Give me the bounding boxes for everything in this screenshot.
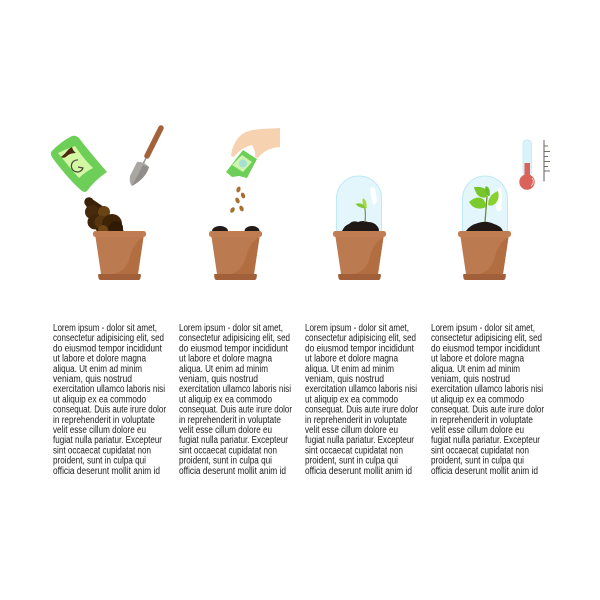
- text column 4: consequat. Duis aute irure dolor: [431, 405, 545, 416]
- text column 3: consectetur adipisicing elit, sed: [305, 333, 416, 344]
- text column 2: exercitation ullamco laboris nisi: [179, 384, 291, 395]
- text column 4: aliqua. Ut enim ad minim: [431, 364, 520, 375]
- text column 2: fugiat nulla pariatur. Excepteur: [179, 435, 289, 446]
- text column 1: Lorem ipsum - dolor sit amet,: [53, 323, 157, 334]
- text column 4: in reprehenderit in voluptate: [431, 415, 533, 426]
- text column 3: consequat. Duis aute irure dolor: [305, 405, 419, 416]
- text column 4: ut aliquip ex ea commodo: [431, 394, 524, 405]
- text column 1: ut aliquip ex ea commodo: [53, 394, 146, 405]
- text column 4: consectetur adipisicing elit, sed: [431, 333, 542, 344]
- text column 2: ut aliquip ex ea commodo: [179, 394, 272, 405]
- text column 3: [305, 323, 419, 477]
- text column 3: sint occaecat cupidatat non: [305, 445, 403, 456]
- icon: hand: [231, 128, 280, 158]
- seeds: [229, 186, 246, 214]
- icon: trowel: [130, 128, 161, 186]
- pot: [93, 231, 146, 280]
- step 3: sprout under glass: [333, 176, 386, 280]
- text column 2: officia deserunt mollit anim id: [179, 466, 286, 477]
- icon: thermometer: [519, 140, 535, 190]
- soil mounds: [212, 226, 260, 231]
- text column 3: velit esse cillum dolore eu: [305, 425, 398, 436]
- glass dome: [462, 176, 508, 231]
- text column 2: ut labore et dolore magna: [179, 354, 272, 365]
- text column 1: aliqua. Ut enim ad minim: [53, 364, 142, 375]
- text column 3: in reprehenderit in voluptate: [305, 415, 407, 426]
- text column 2: aliqua. Ut enim ad minim: [179, 364, 268, 375]
- text column 1: [53, 323, 167, 477]
- pot: [209, 231, 262, 280]
- text column 2: Lorem ipsum - dolor sit amet,: [179, 323, 283, 334]
- text column 4: fugiat nulla pariatur. Excepteur: [431, 435, 541, 446]
- soil: [466, 222, 503, 231]
- text column 1: exercitation ullamco laboris nisi: [53, 384, 165, 395]
- text column 2: consequat. Duis aute irure dolor: [179, 405, 293, 416]
- text column 1: fugiat nulla pariatur. Excepteur: [53, 435, 163, 446]
- text column 3: ut aliquip ex ea commodo: [305, 394, 398, 405]
- text column 4: sint occaecat cupidatat non: [431, 445, 529, 456]
- text column 1: velit esse cillum dolore eu: [53, 425, 146, 436]
- text column 1: proident, sunt in culpa qui: [53, 456, 146, 467]
- text column 4: veniam, quis nostrud: [431, 374, 510, 385]
- text column 2: veniam, quis nostrud: [179, 374, 258, 385]
- pot: [458, 231, 511, 280]
- glass dome: [336, 176, 382, 231]
- text column 4: [431, 323, 545, 477]
- text column 3: Lorem ipsum - dolor sit amet,: [305, 323, 409, 334]
- highlight: [370, 187, 377, 205]
- pot: [333, 231, 386, 280]
- thermometer scale: [544, 140, 550, 182]
- text column 3: ut labore et dolore magna: [305, 354, 398, 365]
- plant: [469, 186, 499, 222]
- sprout: [356, 198, 367, 222]
- text column 1: officia deserunt mollit anim id: [53, 466, 160, 477]
- text column 4: officia deserunt mollit anim id: [431, 466, 538, 477]
- step 4: grown plant under glass with thermometer: [458, 140, 550, 280]
- soil: [342, 221, 379, 231]
- text column 3: officia deserunt mollit anim id: [305, 466, 412, 477]
- text column 4: do eiusmod tempor incididunt: [431, 343, 540, 354]
- text column 2: [179, 323, 293, 477]
- text column 3: fugiat nulla pariatur. Excepteur: [305, 435, 415, 446]
- text column 4: proident, sunt in culpa qui: [431, 456, 524, 467]
- text column 3: exercitation ullamco laboris nisi: [305, 384, 417, 395]
- text column 1: ut labore et dolore magna: [53, 354, 146, 365]
- step 1: soil bag, trowel and pot: [51, 128, 161, 280]
- highlight: [496, 188, 502, 210]
- text column 2: in reprehenderit in voluptate: [179, 415, 281, 426]
- text column 2: velit esse cillum dolore eu: [179, 425, 272, 436]
- text column 1: do eiusmod tempor incididunt: [53, 343, 162, 354]
- text column 3: do eiusmod tempor incididunt: [305, 343, 414, 354]
- text column 2: sint occaecat cupidatat non: [179, 445, 277, 456]
- text column 1: sint occaecat cupidatat non: [53, 445, 151, 456]
- text column 2: proident, sunt in culpa qui: [179, 456, 272, 467]
- text column 4: velit esse cillum dolore eu: [431, 425, 524, 436]
- text column 1: consequat. Duis aute irure dolor: [53, 405, 167, 416]
- text column 2: consectetur adipisicing elit, sed: [179, 333, 290, 344]
- text column 4: ut labore et dolore magna: [431, 354, 524, 365]
- text column 3: veniam, quis nostrud: [305, 374, 384, 385]
- text column 3: proident, sunt in culpa qui: [305, 456, 398, 467]
- text column 2: do eiusmod tempor incididunt: [179, 343, 288, 354]
- step 2: hand sowing seeds: [209, 128, 280, 280]
- text column 1: in reprehenderit in voluptate: [53, 415, 155, 426]
- text column 1: consectetur adipisicing elit, sed: [53, 333, 164, 344]
- icon: fertilizer bag: [51, 136, 107, 192]
- soil pile: [84, 197, 124, 235]
- text column 4: exercitation ullamco laboris nisi: [431, 384, 543, 395]
- text column 3: aliqua. Ut enim ad minim: [305, 364, 394, 375]
- text column 1: veniam, quis nostrud: [53, 374, 132, 385]
- text column 4: Lorem ipsum - dolor sit amet,: [431, 323, 535, 334]
- icon: seed packet: [226, 150, 257, 178]
